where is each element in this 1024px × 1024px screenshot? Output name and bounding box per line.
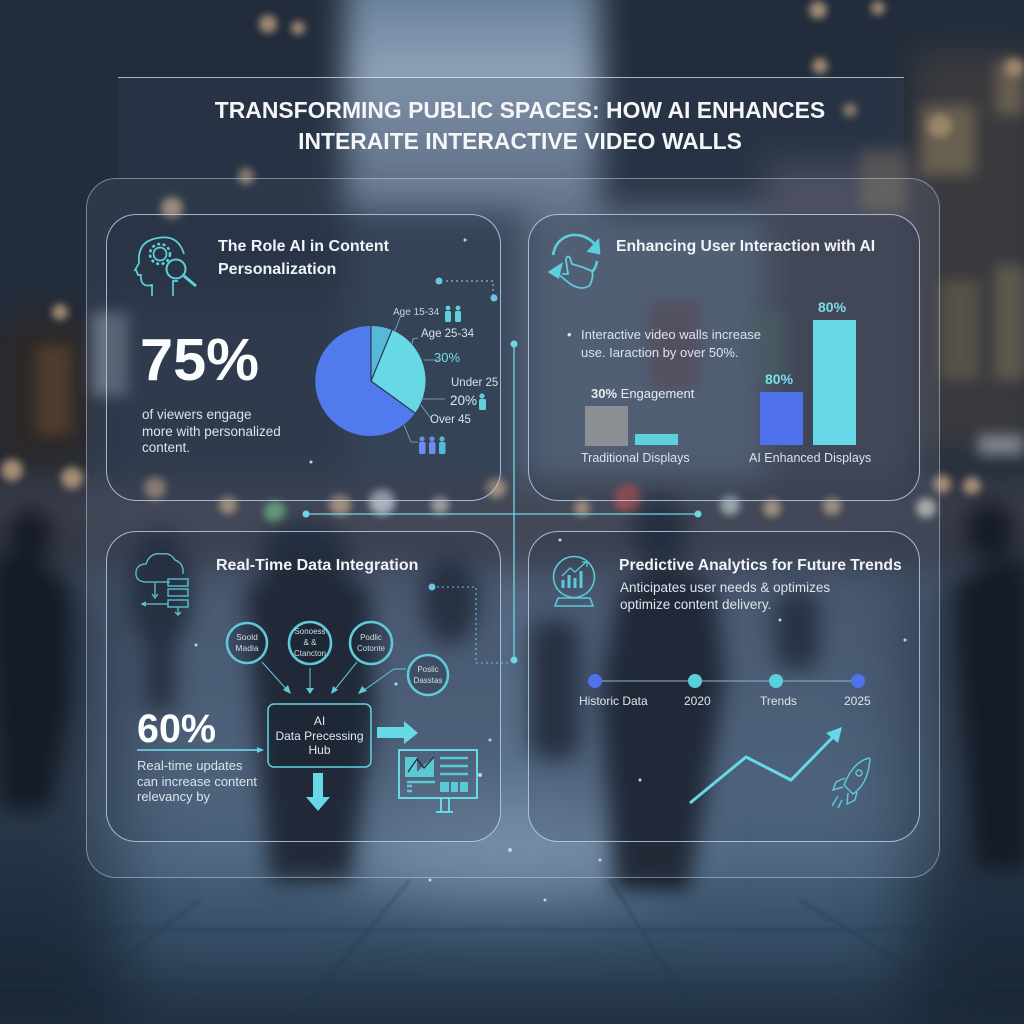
text: real-time updates: can increase content <box>137 774 257 788</box>
text: Ctancton <box>294 649 326 658</box>
text: real-time updates <box>137 758 257 804</box>
heading: content personalization: The Role AI in Content <box>218 238 389 255</box>
text: Trends <box>760 694 797 708</box>
text: interaction bullet <box>567 327 761 360</box>
timeline labels <box>579 694 871 708</box>
panel: predictive analytics <box>528 531 920 842</box>
text: Cotonte <box>357 644 385 653</box>
text: real-time updates: relevancy by <box>137 789 210 804</box>
text: personalized: of viewers engage <box>142 407 252 422</box>
text: personalized <box>142 407 281 455</box>
text: 30% Engagement <box>591 386 694 401</box>
text: Over 45 <box>430 414 471 426</box>
data source labels <box>235 627 442 685</box>
text: Sonoess <box>294 627 326 636</box>
text: Podlic <box>360 633 382 642</box>
text: predictive: optimize content delivery. <box>620 597 771 612</box>
stat: 75%: 75% <box>140 326 259 393</box>
text: 80% <box>765 371 793 387</box>
text: personalized: more with personalized <box>142 424 281 438</box>
hub label: Data Precessing <box>275 728 364 742</box>
text: Interactive video walls increase <box>581 327 761 342</box>
heading: predictive analytics: Predictive Analytics for Future Trends <box>619 557 902 574</box>
text: Poslic <box>417 665 439 674</box>
stat: 60%: 60% <box>137 707 216 751</box>
panel: user interaction <box>528 214 920 501</box>
title <box>215 97 825 154</box>
text: Age 25-34 <box>421 328 474 340</box>
heading: user interaction: Enhancing User Interaction with AI <box>616 238 875 255</box>
heading: content personalization: Personalization <box>218 261 336 278</box>
hub label <box>275 714 364 757</box>
panel: real-time data <box>106 531 501 842</box>
text: Under 25 <box>451 377 498 389</box>
text: personalized: content. <box>142 440 190 455</box>
floor tile lines (decorative) <box>0 880 1024 1024</box>
hub label: Hub <box>308 743 330 757</box>
text: 2025 <box>844 694 871 708</box>
outer glass frame <box>86 178 940 878</box>
text: Soold <box>236 632 258 642</box>
text: & & <box>304 638 316 647</box>
text: 30% <box>434 350 460 365</box>
title: INTERAITE INTERACTIVE VIDEO WALLS <box>298 128 742 154</box>
text: Historic Data <box>579 694 648 708</box>
hub label: AI <box>314 714 325 728</box>
text: real-time updates: Real-time updates <box>137 758 242 773</box>
text: predictive <box>620 580 830 612</box>
text: predictive: Anticipates user needs & optimizes <box>620 580 830 595</box>
pie labels <box>393 307 498 426</box>
header rule <box>118 77 904 78</box>
text: Dasstas <box>414 676 442 685</box>
heading: content personalization <box>218 238 389 278</box>
bar labels <box>581 299 871 465</box>
header band <box>118 78 904 178</box>
text: interaction bullet: • <box>567 327 572 342</box>
text: 2020 <box>684 694 711 708</box>
text: Traditional Displays <box>581 451 690 465</box>
text: 20% <box>450 393 477 408</box>
text: Age 15-34 <box>393 307 439 318</box>
text: 80% <box>818 299 846 315</box>
text: use. Iaraction by over 50%. <box>581 345 739 360</box>
text: Madia <box>235 643 259 653</box>
heading: real-time data: Real-Time Data Integration <box>216 557 418 574</box>
title: TRANSFORMING PUBLIC SPACES: HOW AI ENHANCES <box>215 97 825 123</box>
text: AI Enhanced Displays <box>749 451 871 465</box>
panel: content personalization <box>106 214 501 501</box>
